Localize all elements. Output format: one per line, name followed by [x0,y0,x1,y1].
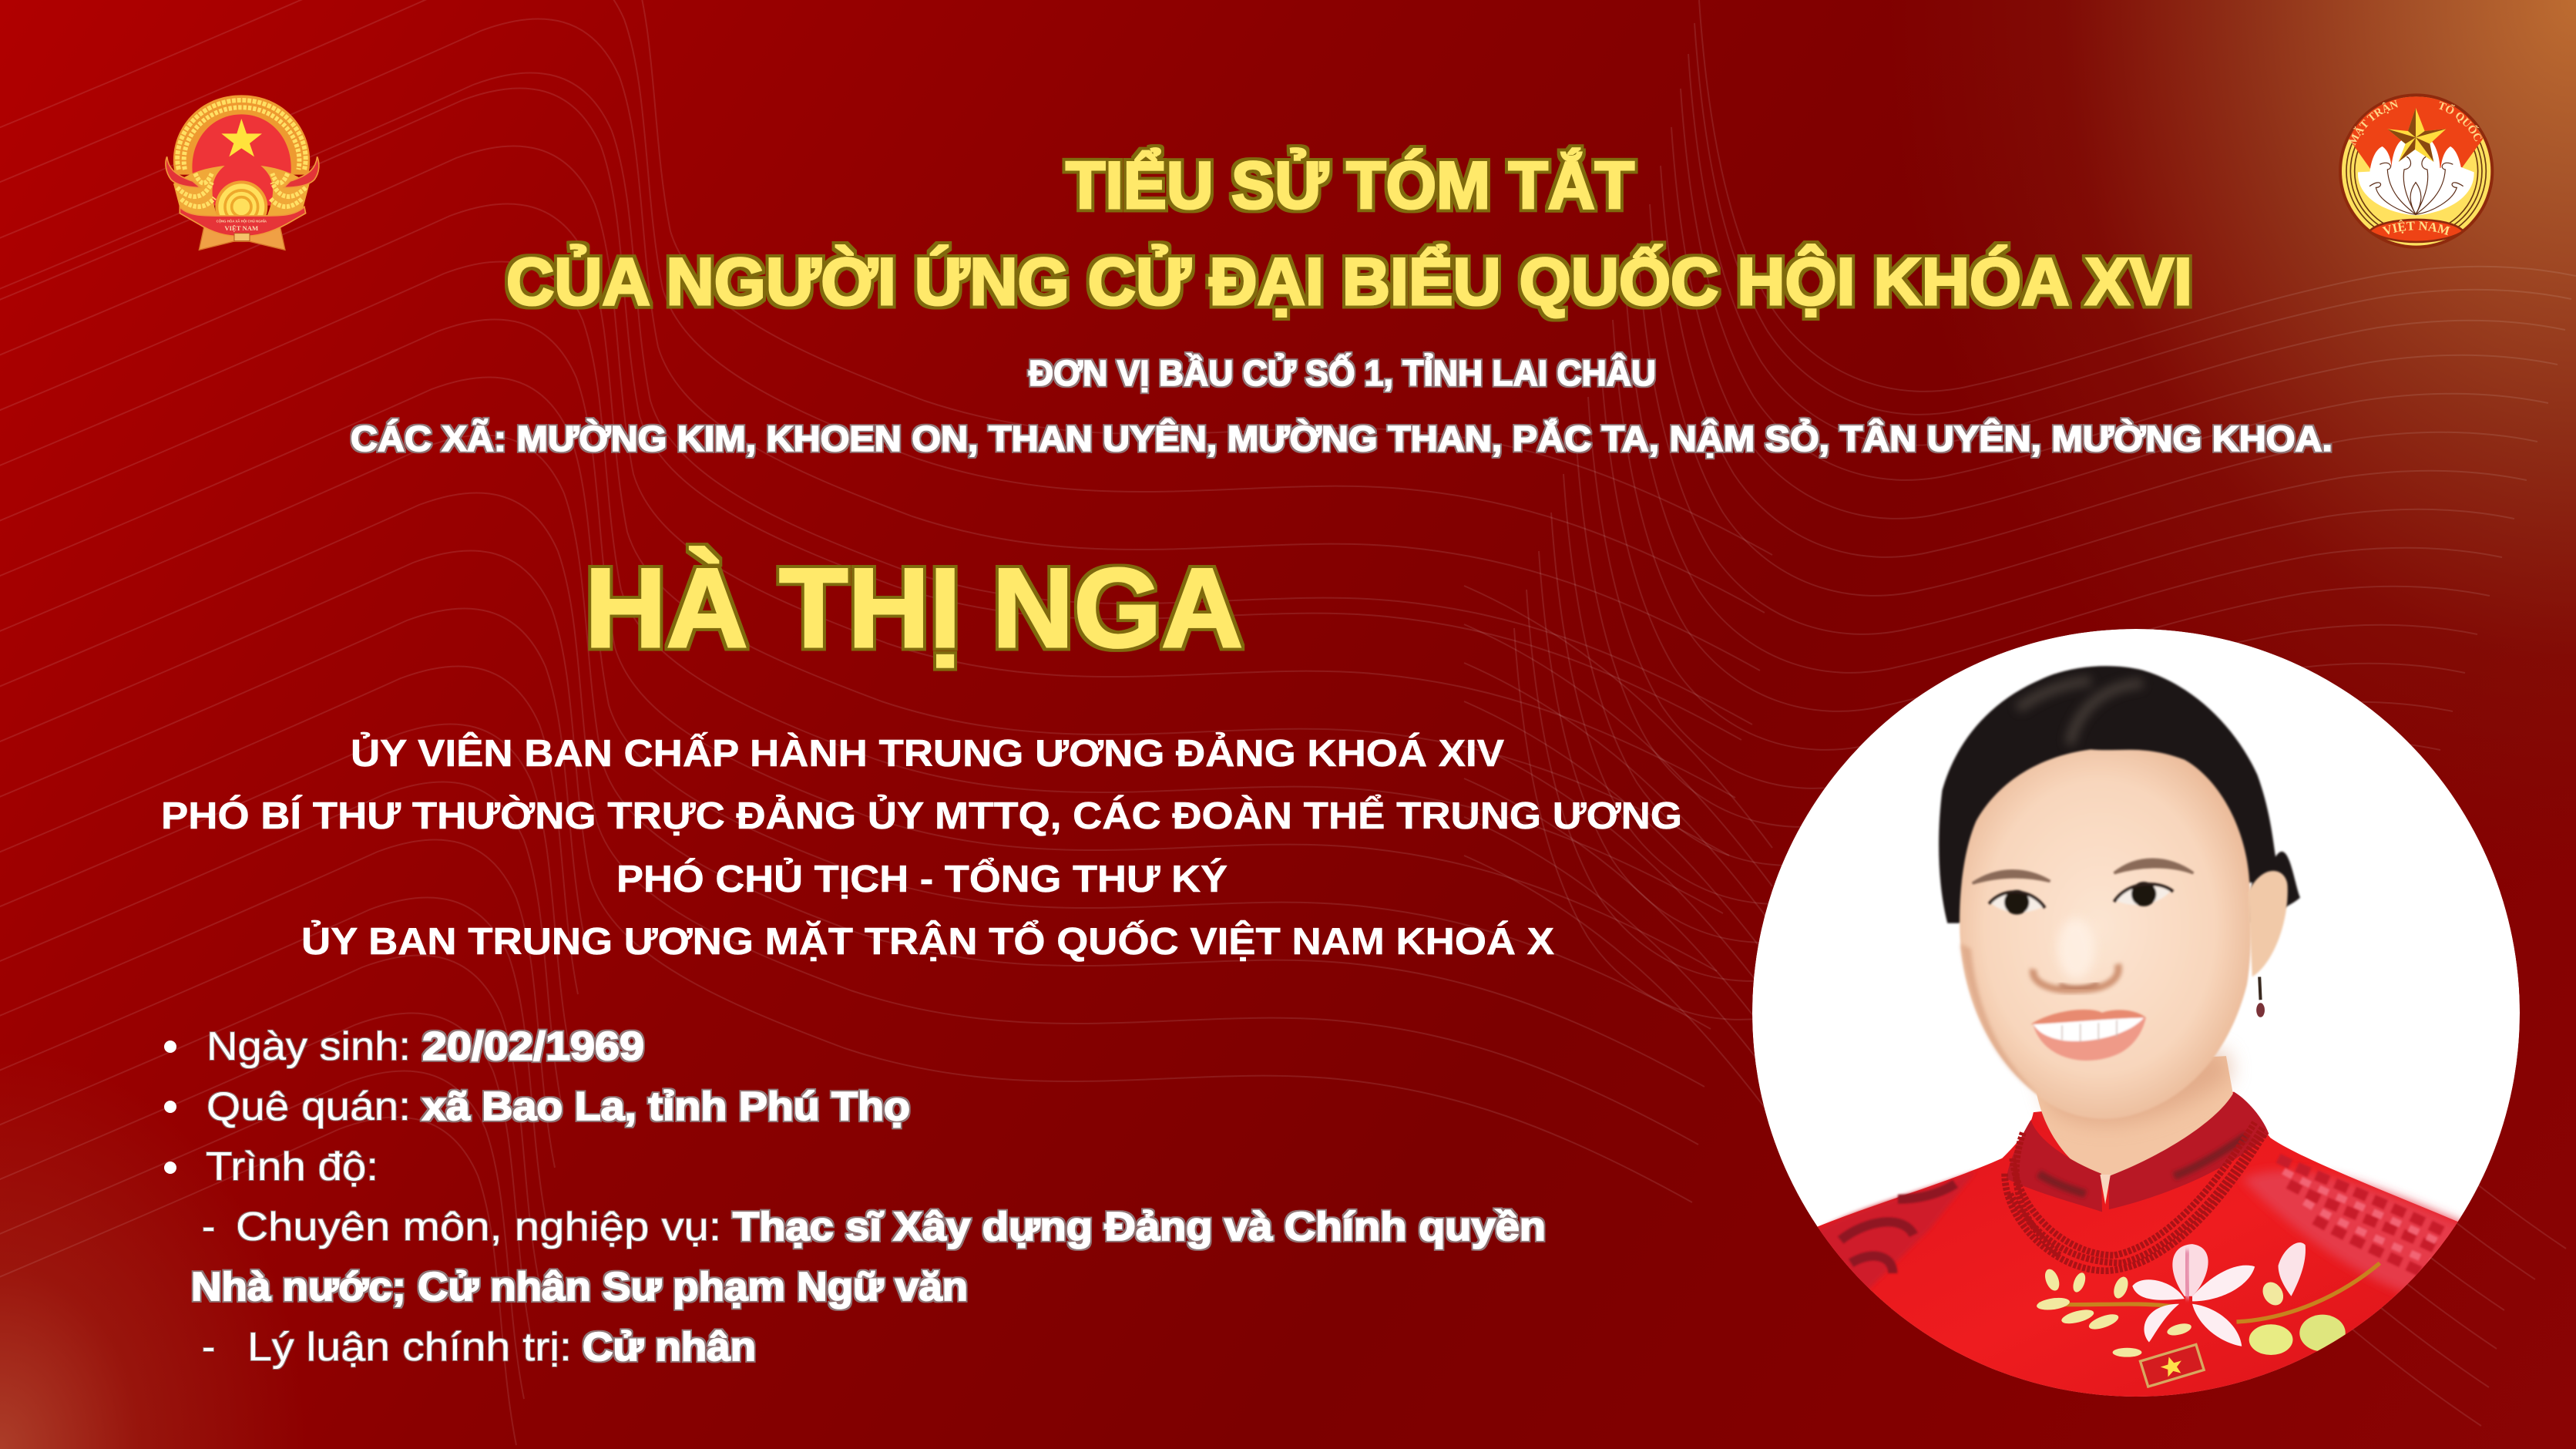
bullet: date of birth: 20/02/1969 [422,1024,644,1069]
nose [2034,918,2118,990]
icon: Vietnam national emblem: VIỆT NAM [224,224,258,232]
emblem red field [192,114,291,206]
face [1960,749,2252,1119]
hair highlight [2018,681,2143,745]
specialist qualification: Nhà nước; Cử nhân Sư phạm Ngữ văn [191,1265,968,1309]
emblem arc text right: TỔ QUỐC [2439,101,2482,142]
bullet: hometown [164,1084,910,1129]
emblem base [199,226,285,250]
blouse branch and leaves [2036,1263,2380,1357]
specialist qualification: Chuyên môn, nghiệp vụ: [236,1205,721,1249]
bullet: education: Trình độ: [206,1145,378,1189]
blouse flower [2132,1242,2306,1346]
emblem side ribbons [166,156,200,187]
candidate roles: ỦY BAN TRUNG ƯƠNG MẶT TRẬN TỔ QUỐC VIỆT NAM KHOÁ X [301,920,1554,963]
bullet: date of birth [164,1024,644,1069]
mouth [2030,1010,2146,1061]
political theory qualification: Cử nhân [583,1325,756,1370]
political theory qualification: Lý luận chính trị: [247,1325,572,1370]
dress [1817,1091,2458,1397]
political theory qualification: - [202,1325,215,1370]
specialist qualification: Thạc sĩ Xây dựng Đảng và Chính quyền [733,1205,1546,1249]
title line 1: TIỂU SỬ TÓM TẮT [1066,149,1634,223]
red VIỆT NAM banner [2369,220,2463,242]
portrait photo [1752,629,2520,1434]
specialist qualification [191,1205,1546,1309]
specialist qualification: - [202,1205,215,1249]
white lotus [2358,139,2474,215]
communes list: CÁC XÃ: MƯỜNG KIM, KHOEN ON, THAN UYÊN, MƯỜNG THAN, PẮC TA, NẬM SỎ, TÂN UYÊN, MƯỜNG KHOA. [351,419,2333,459]
candidate roles [161,732,1682,963]
emblem bottom ribbon [180,207,306,237]
hair [1939,666,2300,923]
bullet: date of birth: Ngày sinh: [207,1024,411,1069]
emblem gear [215,180,267,233]
icon: Vietnam national emblem: CỘNG HÒA XÃ HỘI CHỦ NGHĨA [217,219,267,223]
candidate roles: PHÓ CHỦ TỊCH - TỔNG THƯ KÝ [616,858,1228,900]
political theory qualification [202,1325,756,1370]
bullet: hometown: Quê quán: [207,1084,411,1129]
five-point star [2387,108,2446,162]
candidate roles: PHÓ BÍ THƯ THƯỜNG TRỰC ĐẢNG ỦY MTTQ, CÁC ĐOÀN THỂ TRUNG ƯƠNG [161,795,1682,837]
icon: Vietnam national emblem [166,95,319,250]
emblem star [221,119,262,156]
bead necklace [2005,1122,2265,1271]
neck [2037,1056,2233,1176]
jaw shading [1960,943,2039,1094]
ear [2248,871,2288,977]
collar [2007,1120,2102,1212]
candidate name: HÀ THỊ NGA [585,545,1243,671]
constituency heading: ĐƠN VỊ BẦU CỬ SỐ 1, TỈNH LAI CHÂU [1029,353,1656,393]
bullet: hometown: xã Bao La, tỉnh Phú Thọ [422,1084,910,1129]
emblem arc text left: MẶT TRẬN [2349,100,2398,146]
emblem lower wheat [173,166,225,217]
biography list [164,1024,1546,1370]
eyebrows [1973,871,2050,883]
delegate pin [2140,1344,2204,1387]
candidate roles: ỦY VIÊN BAN CHẤP HÀNH TRUNG ƯƠNG ĐẢNG KHOÁ XIV [351,732,1504,775]
earring [2256,977,2265,1017]
sleeve pattern [1815,1158,2471,1306]
icon: Fatherland Front emblem [2339,93,2494,248]
icon: Fatherland Front emblem: VIỆT NAM [2382,220,2450,236]
eyes [1989,882,2173,915]
title line 2: CỦA NGƯỜI ỨNG CỬ ĐẠI BIỂU QUỐC HỘI KHÓA XVI [506,245,2192,319]
red top cap [2349,96,2483,170]
wheat ring [173,95,310,175]
